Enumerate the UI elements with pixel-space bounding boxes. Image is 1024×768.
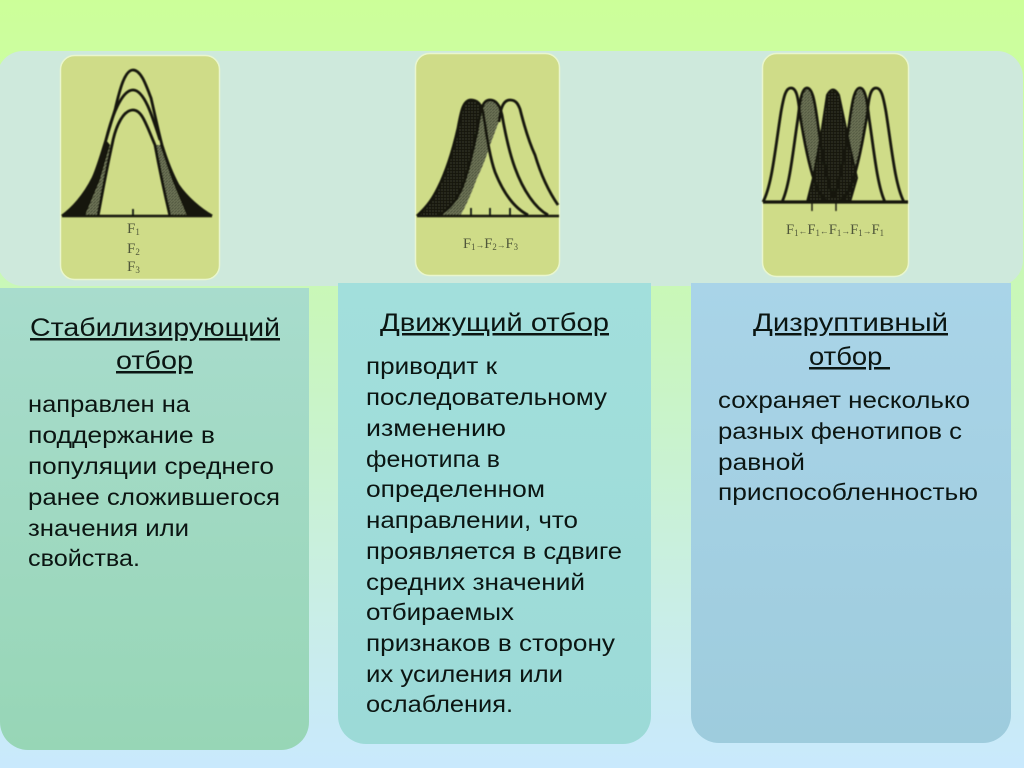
text: disruptive description: равной (718, 449, 805, 475)
heading: stabilizing selection: Стабилизирующий (30, 314, 280, 342)
heading: disruptive selection (753, 309, 948, 371)
heading: disruptive selection: отбор (809, 343, 890, 371)
text: stabilizing description: поддержание в (28, 422, 215, 448)
chart: directional selection curves: 2 (492, 242, 497, 252)
chart: disruptive selection curves: F (871, 222, 880, 238)
text: stabilizing description: популяции среднего (28, 453, 274, 479)
heading: directional selection: Движущий отбор (380, 309, 609, 337)
chart: stabilizing selection curves: 1 (135, 227, 140, 237)
heading: stabilizing selection (30, 314, 280, 375)
chart: disruptive selection curves: ← (799, 226, 807, 236)
chart: stabilizing selection curves: 2 (135, 247, 140, 257)
chart: directional selection curves: → (497, 240, 506, 250)
text: stabilizing description: ранее сложившегося (28, 484, 280, 510)
heading: stabilizing selection: отбор (116, 347, 193, 375)
text: directional description: признаков в сторону (366, 630, 616, 656)
text: directional description: средних значений (366, 569, 585, 595)
text: stabilizing description: направлен на (28, 391, 190, 417)
text: directional description: приводит к (366, 353, 498, 379)
text: disruptive description: сохраняет несколько (718, 387, 970, 413)
chart: directional selection curves (416, 54, 560, 276)
text: stabilizing description: свойства. (28, 545, 140, 571)
heading: disruptive selection: Дизруптивный (753, 309, 948, 337)
text: directional description: ослабления. (366, 691, 513, 717)
chart: disruptive selection curves (762, 54, 908, 276)
text: directional description: последовательному (366, 384, 608, 410)
chart: directional selection curves: F (506, 236, 514, 252)
chart: disruptive selection curves: → (863, 226, 871, 236)
chart: disruptive selection curves: 1 (858, 228, 863, 238)
top band behind diagrams (0, 51, 1023, 286)
panel: disruptive selection (691, 283, 1011, 743)
text: directional description: отбираемых (366, 599, 515, 625)
chart: disruptive selection curves: F (850, 222, 858, 238)
panel: directional selection (338, 283, 651, 744)
chart: directional selection curves: F (463, 236, 471, 252)
text: directional description: их усиления или (366, 661, 563, 687)
chart: stabilizing selection curves: F (127, 221, 135, 237)
text: disruptive description (718, 387, 978, 505)
chart: directional selection curves: F (484, 236, 493, 252)
text: directional description: определенном (366, 476, 545, 502)
chart: disruptive selection curves: ← (820, 226, 829, 236)
chart: disruptive selection curves: 1 (880, 228, 884, 238)
chart: directional selection curves: 1 (471, 242, 475, 252)
chart: disruptive selection curves: 1 (816, 228, 820, 238)
chart: disruptive selection curves: 1 (837, 228, 841, 238)
text: directional description: фенотипа в (366, 446, 500, 472)
chart: disruptive selection curves: F (786, 222, 794, 238)
chart: directional selection curves: → (475, 240, 484, 250)
text: directional description (366, 353, 622, 717)
chart: disruptive selection curves: 1 (794, 228, 799, 238)
chart: disruptive selection curves: → (841, 226, 850, 236)
panel: stabilizing selection (0, 288, 309, 750)
text: directional description: направлении, что (366, 507, 578, 533)
chart: stabilizing selection curves (60, 56, 220, 280)
chart: stabilizing selection curves: 3 (135, 265, 140, 275)
chart: stabilizing selection curves: F (127, 241, 135, 257)
chart: disruptive selection curves: F (829, 222, 837, 238)
text: disruptive description: разных фенотипов с (718, 418, 962, 444)
text: stabilizing description (28, 391, 280, 571)
text: directional description: изменению (366, 415, 506, 441)
text: disruptive description: приспособленностью (718, 479, 978, 505)
chart: stabilizing selection curves: F (127, 259, 135, 275)
text: directional description: проявляется в сдвиге (366, 538, 622, 564)
chart: directional selection curves: 3 (514, 242, 518, 252)
chart: disruptive selection curves: F (807, 222, 816, 238)
text: stabilizing description: значения или (28, 515, 189, 541)
